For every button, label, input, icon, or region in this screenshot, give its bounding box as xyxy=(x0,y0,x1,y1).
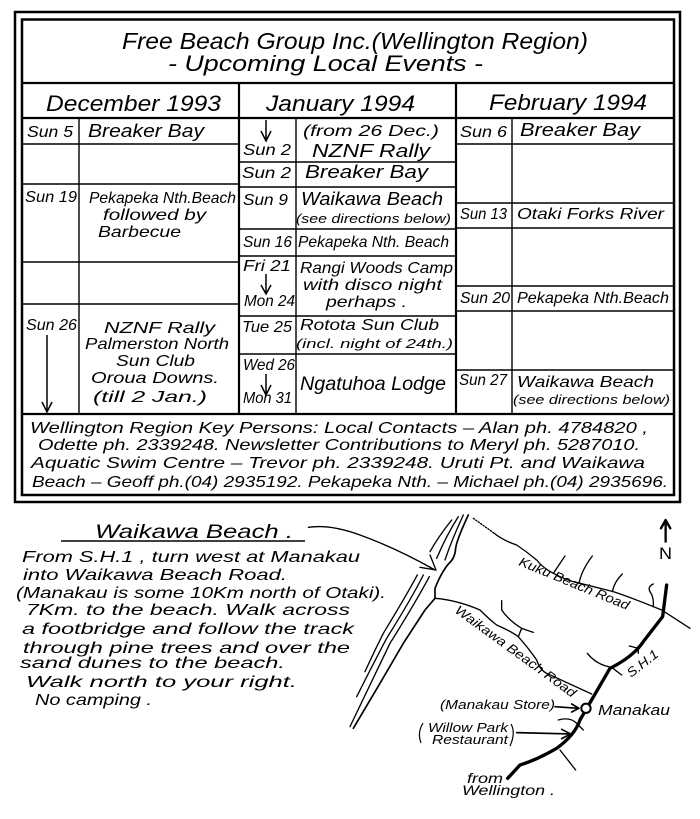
icon: north arrow xyxy=(661,520,670,542)
text block: directions: From S.H.1 , turn west at Manakau xyxy=(22,549,360,566)
arrow: Wed 26 to Mon 31 xyxy=(261,374,271,395)
column: December 1993: Breaker Bay xyxy=(88,121,205,141)
title xyxy=(122,28,588,76)
map labels: Willow Park xyxy=(428,720,510,735)
text block: key persons xyxy=(30,420,668,491)
icon: Manakau marker xyxy=(581,704,591,713)
column: January 1994: Pekapeka Nth. Beach xyxy=(298,234,449,251)
column: January 1994: Sun 2 xyxy=(243,142,291,159)
text block: key persons: Wellington Region Key Persons: Local Contacts – Alan ph. 4784820 , xyxy=(30,420,648,437)
text block: directions: Walk north to your right. xyxy=(26,674,297,691)
arrow: from December xyxy=(261,120,271,141)
map labels: Restaurant xyxy=(432,732,510,747)
column: January 1994: (see directions below) xyxy=(296,211,451,226)
text block: key persons: Aquatic Swim Centre – Trevor ph. 2339248. Uruti Pt. and Waikawa xyxy=(30,455,645,472)
column: February 1994: Breaker Bay xyxy=(520,120,641,140)
title: - Upcoming Local Events - xyxy=(168,51,483,76)
column: January 1994: NZNF Rally xyxy=(312,141,431,161)
map labels: Waikawa Beach Road xyxy=(452,602,580,701)
text block: directions: No camping . xyxy=(35,692,152,709)
column: January 1994: Breaker Bay xyxy=(305,162,429,182)
column: January 1994: Sun 2 xyxy=(242,165,291,182)
column: January 1994: January 1994 xyxy=(265,91,415,116)
column: December 1993: Palmerston North xyxy=(85,336,229,353)
column: January 1994: Rangi Woods Camp xyxy=(300,260,453,277)
column: January 1994: Mon 24 xyxy=(244,293,295,310)
arrow: Sun 26 continues xyxy=(42,335,52,412)
map labels xyxy=(419,544,672,798)
column: February 1994: Sun 27 xyxy=(459,372,508,389)
panel: events calendar xyxy=(15,12,680,502)
arrows: store and restaurant pointers xyxy=(517,704,579,739)
column: December 1993 xyxy=(25,91,236,412)
text block: directions: into Waikawa Beach Road. xyxy=(23,567,287,584)
column: January 1994 xyxy=(242,91,453,407)
map labels: Kuku Beach Road xyxy=(517,554,632,613)
heading: Waikawa Beach . xyxy=(95,522,293,543)
map labels: (Manakau Store) xyxy=(440,697,555,712)
column: January 1994: Fri 21 xyxy=(243,258,291,275)
road: S.H.1 xyxy=(508,585,667,778)
column: December 1993: NZNF Rally xyxy=(104,320,216,337)
column: February 1994: (see directions below) xyxy=(513,392,670,407)
map labels: Manakau xyxy=(598,702,671,719)
text block: directions: 7Km. to the beach. Walk across xyxy=(26,602,350,619)
column: February 1994: Pekapeka Nth.Beach xyxy=(517,290,669,307)
column: February 1994: Sun 6 xyxy=(460,124,507,141)
column: December 1993: Oroua Downs. xyxy=(91,370,219,387)
column: January 1994: Sun 9 xyxy=(243,192,288,209)
map labels: Wellington . xyxy=(462,782,555,798)
column: January 1994: (incl. night of 24th.) xyxy=(296,336,453,351)
column: December 1993: Pekapeka Nth.Beach xyxy=(89,190,236,207)
column: December 1993: (till 2 Jan.) xyxy=(93,389,207,406)
column: February 1994: February 1994 xyxy=(489,90,647,115)
text block: directions: (Manakau is some 10Km north of Otaki). xyxy=(16,585,386,602)
column: January 1994: Waikawa Beach xyxy=(301,189,443,209)
column: January 1994: Mon 31 xyxy=(243,390,292,407)
arrow: Fri 21 to Mon 24 xyxy=(261,274,271,294)
column: December 1993: Sun 26 xyxy=(26,317,77,334)
column: February 1994: Waikawa Beach xyxy=(517,374,654,391)
column: January 1994: Ngatuhoa Lodge xyxy=(300,374,446,395)
text block: directions: a footbridge and follow the track xyxy=(22,621,355,638)
column: February 1994: Sun 20 xyxy=(460,290,510,307)
text block: directions: through pine trees and over the xyxy=(23,640,350,657)
road: Waikawa Beach Road xyxy=(435,598,592,694)
outer frame xyxy=(15,12,680,502)
text block: directions: sand dunes to the beach. xyxy=(20,655,285,672)
road: Kuku Beach Road xyxy=(473,518,690,628)
column: January 1994: Tue 25 xyxy=(242,319,292,336)
column: January 1994: perhaps . xyxy=(325,294,407,311)
text block: key persons: Odette ph. 2339248. Newsletter Contributions to Meryl ph. 5287010. xyxy=(38,437,640,454)
panel: Waikawa Beach directions xyxy=(16,522,386,709)
column: December 1993: Barbecue xyxy=(98,224,181,241)
map labels: from xyxy=(467,770,503,786)
title: Free Beach Group Inc.(Wellington Region) xyxy=(122,28,588,54)
map labels: S.H.1 xyxy=(624,646,661,680)
column: January 1994: Rotota Sun Club xyxy=(300,317,439,334)
text block: directions xyxy=(16,549,386,709)
column: December 1993: Sun 19 xyxy=(25,189,77,206)
column: February 1994: Otaki Forks River xyxy=(517,206,665,223)
column: January 1994: (from 26 Dec.) xyxy=(303,123,439,140)
text block: key persons: Beach – Geoff ph.(04) 2935192. Pekapeka Nth. – Michael ph.(04) 2935696. xyxy=(32,474,668,491)
column: February 1994 xyxy=(459,90,670,407)
map: route to Waikawa Beach xyxy=(308,515,690,798)
map labels: N xyxy=(659,544,672,563)
column: February 1994: Sun 13 xyxy=(460,206,507,223)
coast, river and beach arrow xyxy=(308,515,468,728)
column: January 1994: Wed 26 xyxy=(243,357,295,374)
column: December 1993: followed by xyxy=(103,207,207,224)
column: December 1993: Sun 5 xyxy=(27,124,73,141)
column: January 1994: with disco night xyxy=(303,277,443,294)
column: December 1993: December 1993 xyxy=(46,91,222,116)
column: December 1993: Sun Club xyxy=(116,353,195,370)
column: January 1994: Sun 16 xyxy=(243,234,292,251)
